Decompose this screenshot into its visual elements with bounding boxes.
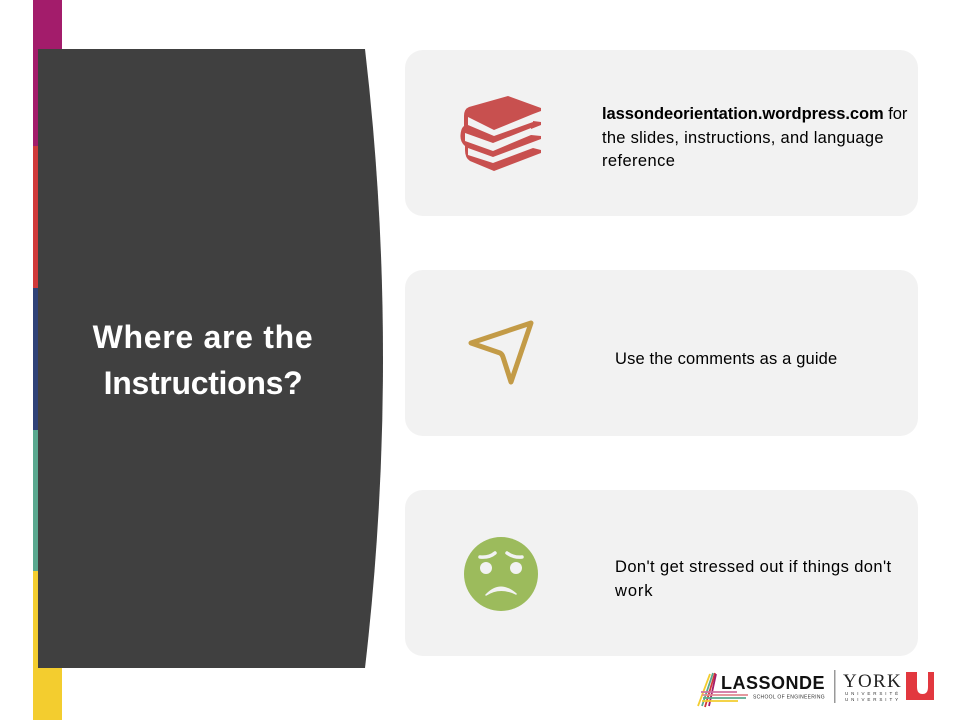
title: Instructions?: [104, 365, 302, 401]
logo: Lassonde and York: [697, 670, 934, 708]
website text: the slides, instructions, and language: [602, 128, 884, 146]
icon: worried face: [464, 537, 538, 611]
icon: navigation arrow: [468, 320, 534, 384]
logo: Lassonde and York: UNIVERSITY: [845, 697, 901, 702]
title: [92, 319, 313, 401]
stress text: [615, 558, 892, 600]
panel: stress card: [405, 490, 918, 656]
panel: comments card: [405, 270, 918, 436]
panel: website card: [405, 50, 918, 216]
logo: Lassonde and York: YORK: [843, 671, 902, 692]
comments text: Use the comments as a guide: [615, 350, 837, 368]
icon: books: [460, 96, 541, 171]
website text: [602, 105, 908, 170]
stress text: work: [615, 582, 653, 600]
stress text: Don't get stressed out if things don't: [615, 558, 892, 576]
website text: reference: [602, 152, 675, 170]
title: Where are the: [93, 319, 313, 355]
website text: lassondeorientation.wordpress.com for: [602, 105, 907, 123]
logo: Lassonde and York: LASSONDE: [721, 673, 825, 693]
logo: Lassonde and York: SCHOOL OF ENGINEERING: [753, 694, 825, 700]
colour stripe: [33, 0, 62, 720]
logo: Lassonde and York: UNIVERSITÉ: [845, 690, 901, 696]
